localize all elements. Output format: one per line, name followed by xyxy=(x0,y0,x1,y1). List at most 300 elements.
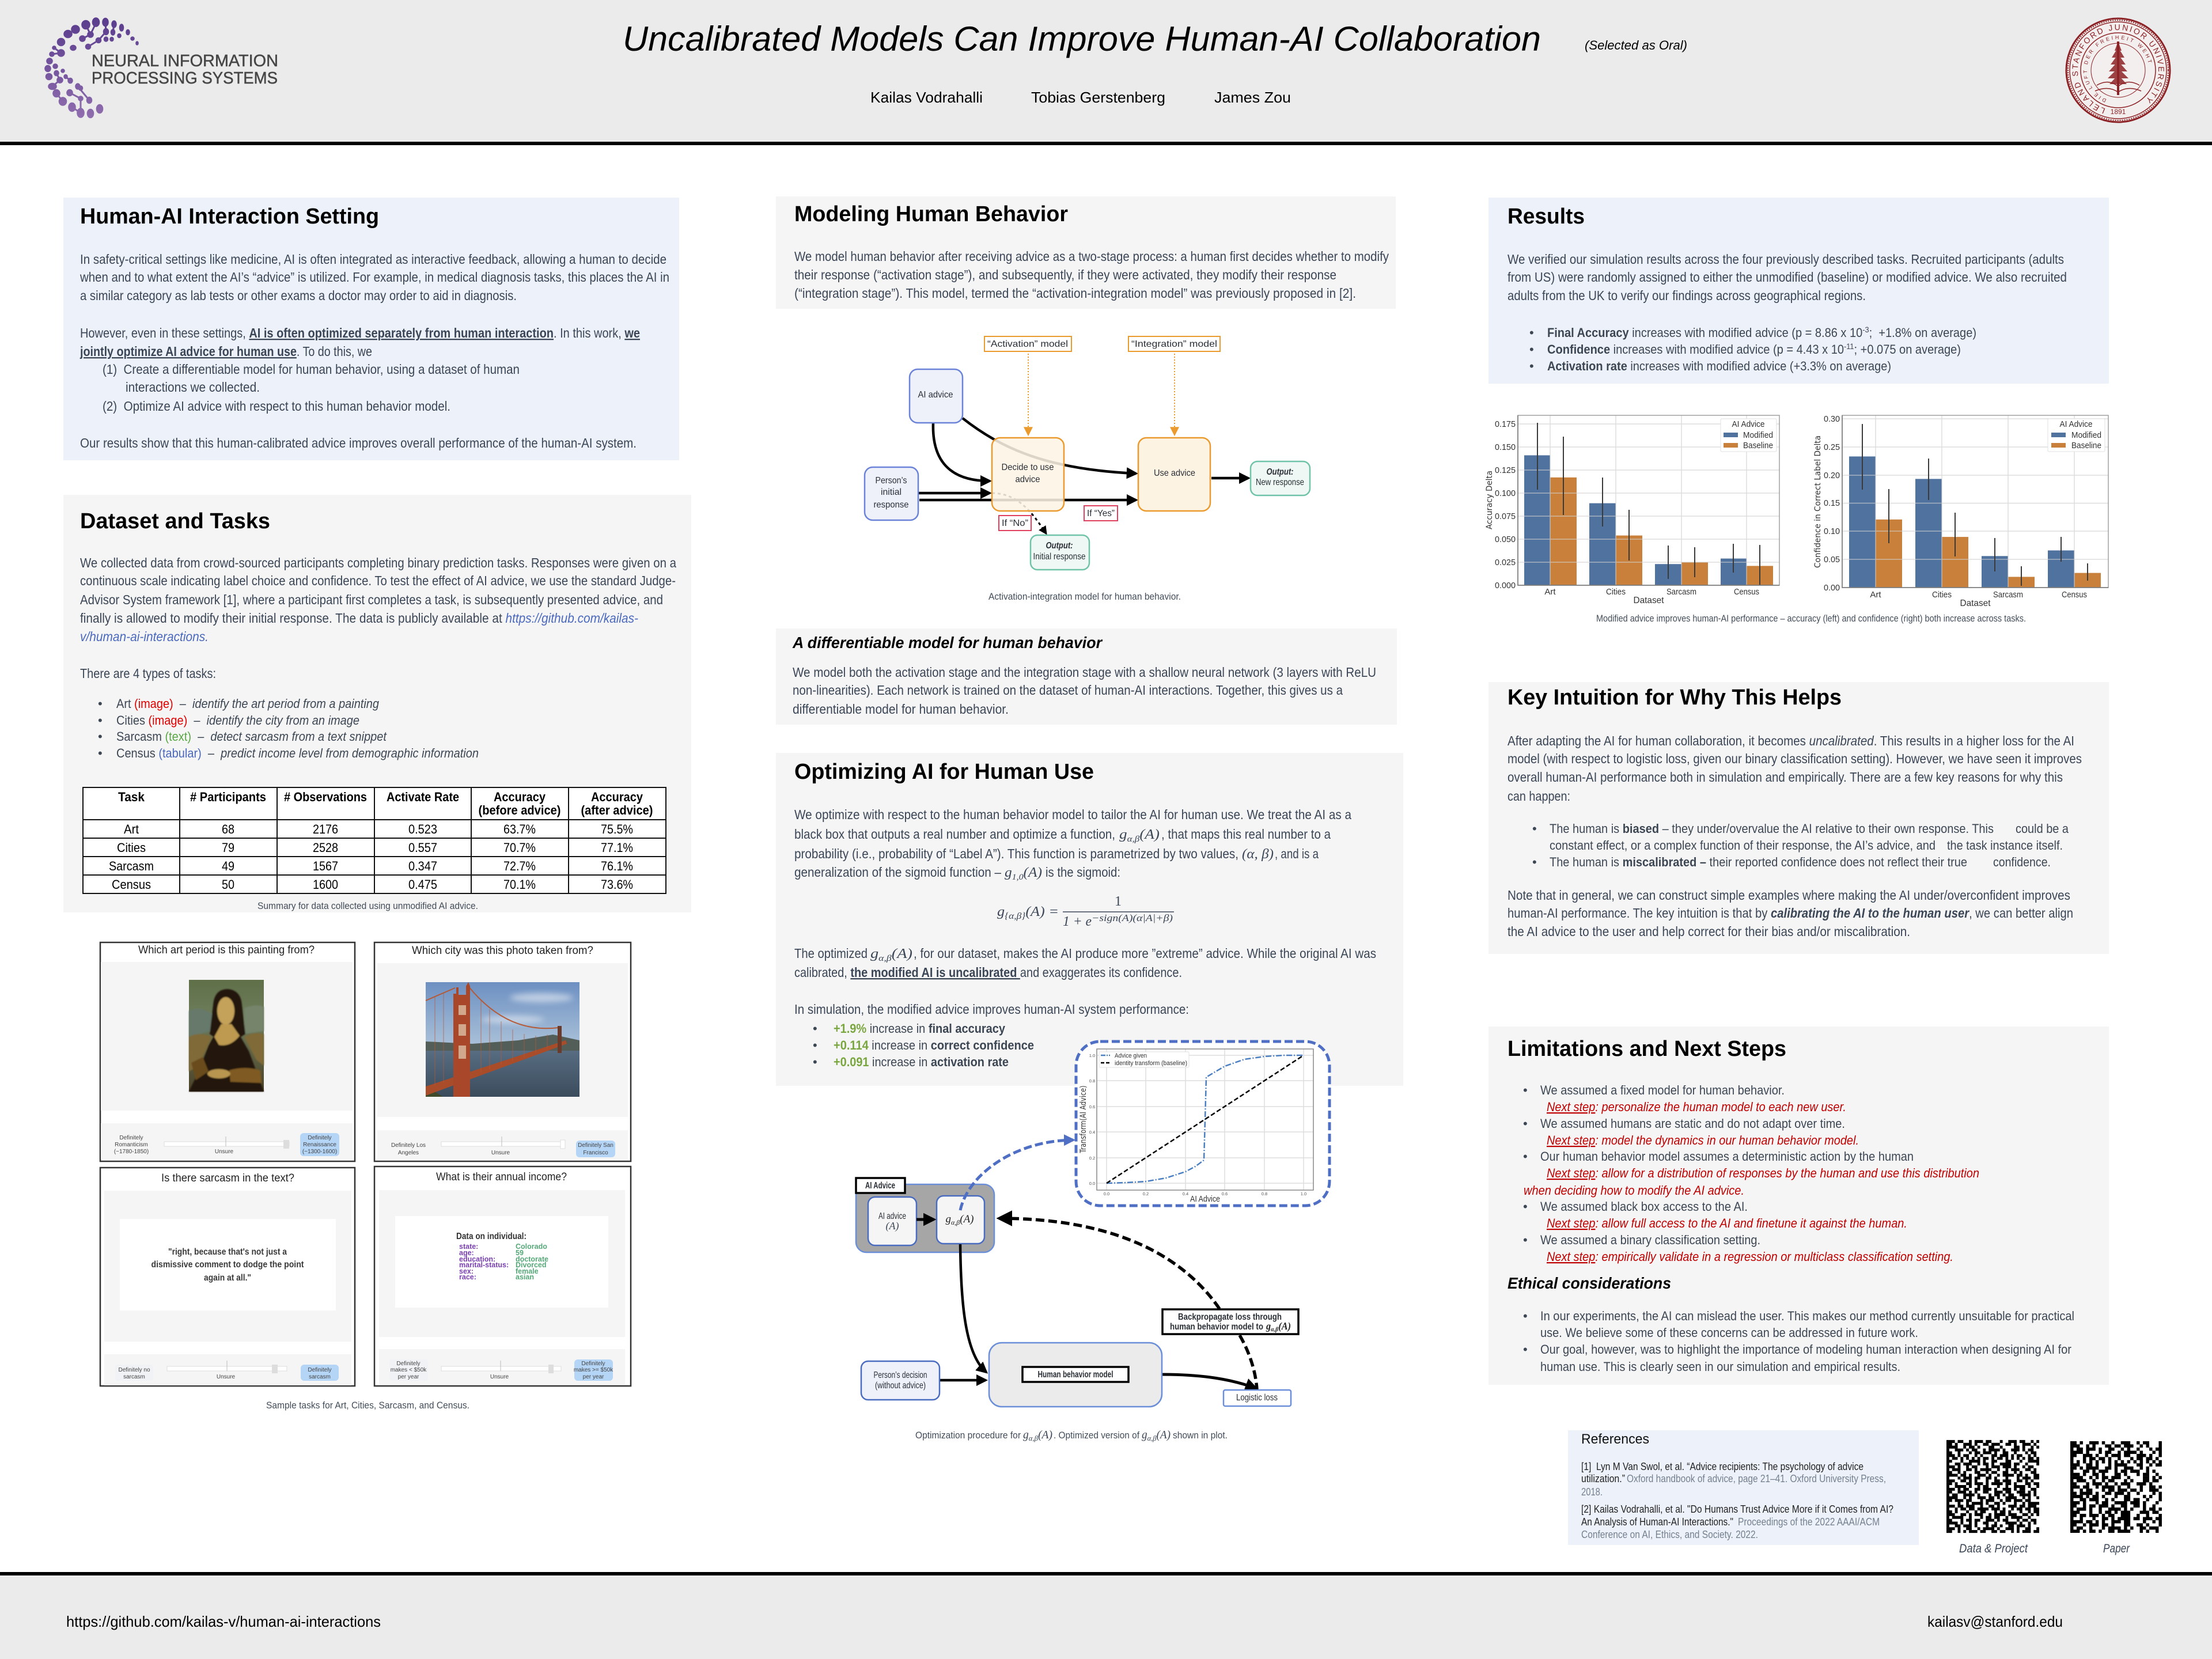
sub-heading: A differentiable model for human behavior xyxy=(792,634,1103,652)
limitations list: • xyxy=(1523,1116,1528,1131)
reasons list: The human is miscalibrated – their reported confidence does not reflect their true xyxy=(1550,855,1967,869)
optimization caption: (A) xyxy=(1038,1429,1052,1441)
box: AI advice xyxy=(910,369,963,423)
answer slider: sarcasm xyxy=(123,1374,145,1380)
authors: Tobias Gerstenberg xyxy=(1031,89,1165,106)
sample task: art xyxy=(100,942,355,1161)
data table: 77.1% xyxy=(601,840,633,855)
legend: Advice given xyxy=(1115,1052,1147,1059)
panel: Results xyxy=(1488,198,2109,384)
y tick labels: 0.25 xyxy=(1824,442,1840,452)
description text: There are 4 types of tasks: xyxy=(80,666,216,681)
description text: overall human-AI performance both in simulation and empirically. There are a few key reasons for why this xyxy=(1508,770,2063,785)
diagram caption: Activation-integration model for human behavior. xyxy=(988,591,1181,602)
results list xyxy=(1529,325,1976,373)
key intuition text: human-AI performance. The key intuition is that by calibrating the AI to the human user, we can better align xyxy=(1508,906,2073,921)
optimization caption: shown in plot. xyxy=(1173,1430,1228,1441)
box: Activation model: “Activation” model xyxy=(987,339,1068,349)
x tick labels: Sarcasm xyxy=(1993,590,2023,600)
task type list xyxy=(98,696,479,760)
y tick labels: 0.15 xyxy=(1824,498,1840,508)
box: output initial response xyxy=(1031,535,1089,570)
data table: 73.6% xyxy=(601,877,633,892)
group: AI Advice xyxy=(856,1178,994,1252)
ethical list: Our goal, however, was to highlight the importance of modeling human interaction when designing AI for xyxy=(1540,1342,2071,1357)
axis tick labels: 0.4 xyxy=(1089,1130,1095,1135)
data table: 2528 xyxy=(313,840,338,855)
box: backpropagate loss: α,β xyxy=(1271,1326,1279,1333)
answer slider: Renaissance xyxy=(303,1142,336,1148)
diagram: optimization procedure xyxy=(856,1140,1298,1407)
answer slider xyxy=(391,1137,615,1157)
data table: 75.5% xyxy=(601,822,633,836)
box: output new response: Output: xyxy=(1266,467,1294,477)
sarcasm quote: dismissive comment to dodge the point xyxy=(151,1260,304,1270)
optimization caption: g xyxy=(1023,1429,1029,1441)
y tick labels: 0.175 xyxy=(1495,419,1516,429)
results list: ; +0.075 on average) xyxy=(1854,342,1961,357)
box: person's decision: (without advice) xyxy=(875,1381,926,1391)
data table: 0.475 xyxy=(408,877,437,892)
answer slider: Unsure xyxy=(215,1149,234,1155)
y tick labels: 0.000 xyxy=(1495,581,1516,590)
axis tick labels: 0.0 xyxy=(1089,1181,1095,1186)
limitations list: • xyxy=(1523,1083,1528,1097)
limitations list: Next step: model the dynamics in our human behavior model. xyxy=(1547,1133,1859,1147)
description text: We collected data from crowd-sourced participants completing binary prediction tasks. Responses were given on a xyxy=(80,555,676,570)
description text: g xyxy=(1005,865,1012,880)
sigmoid formula: 1 + e xyxy=(1063,914,1092,929)
reasons list xyxy=(1532,821,2069,869)
description text: We model both the activation stage and the integration stage with a shallow neural network (3 layers with ReLU xyxy=(793,665,1376,680)
x tick labels xyxy=(1544,587,1759,605)
box: backpropagate loss: g xyxy=(1266,1320,1271,1332)
data table: 72.7% xyxy=(503,859,536,873)
panel: References: [2] Kailas Vodrahalli, et al. "Do Humans Trust Advice More if it Comes from AI? xyxy=(1581,1503,1893,1515)
box: output initial response: Initial response xyxy=(1033,552,1086,562)
individual data: marital-status: xyxy=(459,1261,509,1269)
panel: References: An Analysis of Human-AI Interactions." xyxy=(1581,1516,1733,1528)
y tick labels: 0.025 xyxy=(1495,558,1516,567)
image: Mona Lisa painting xyxy=(189,980,264,1092)
sigmoid formula: g xyxy=(997,904,1004,919)
charts caption: Modified advice improves human-AI performance – accuracy (left) and confidence (right) both increase across tasks. xyxy=(1596,613,2026,624)
individual data: Colorado xyxy=(516,1243,547,1251)
limitations list xyxy=(1523,1083,1979,1264)
data table: 63.7% xyxy=(503,822,536,836)
description text: We verified our simulation results across the four previously described tasks. Recruited participants (adults xyxy=(1508,252,2064,267)
individual data: asian xyxy=(516,1273,534,1281)
heading: Human-AI Interaction Setting xyxy=(80,204,379,229)
key claim text: (1) Create a differentiable model for human behavior, using a dataset of human xyxy=(103,362,520,377)
axis tick labels: 0.6 xyxy=(1222,1191,1228,1196)
box: logistic loss xyxy=(1224,1390,1291,1406)
data table: 49 xyxy=(222,859,234,873)
logo: NeurIPS: NEURAL INFORMATION xyxy=(92,52,278,70)
data table: Sarcasm xyxy=(109,859,154,873)
limitations list: Next step: empirically validate in a regression or multiclass classification setting. xyxy=(1547,1249,1953,1264)
description text xyxy=(793,665,1376,717)
answer slider: Unsure xyxy=(217,1374,236,1380)
sample task: art: Which art period is this painting from? xyxy=(138,944,315,956)
box: person's decision: Person’s decision xyxy=(873,1370,927,1380)
individual data: age: xyxy=(459,1249,474,1257)
panel: References: Oxford handbook of advice, page 21–41. Oxford University Press, xyxy=(1627,1473,1886,1484)
box: Person's initial response: Person’s xyxy=(876,476,907,486)
results list: Activation rate increases with modified advice (+3.3% on average) xyxy=(1547,359,1891,373)
description text: can happen: xyxy=(1508,789,1570,804)
sarcasm quote: again at all." xyxy=(204,1273,251,1283)
x tick labels: Cities xyxy=(1606,587,1626,597)
box: Use advice xyxy=(1138,438,1210,511)
legend: Baseline xyxy=(2071,441,2101,450)
axis titles: Transform(AI Advice) xyxy=(1079,1085,1088,1153)
ethical list: • xyxy=(1523,1309,1528,1323)
results list: -11 xyxy=(1844,342,1854,351)
y axis title: Confidence in Correct Label Delta xyxy=(1813,435,1823,568)
description text: differentiable model for human behavior. xyxy=(793,702,1009,717)
axis tick labels: 1.0 xyxy=(1301,1191,1306,1196)
header band xyxy=(0,0,2212,145)
description text: α,β xyxy=(1127,835,1140,844)
ethical list xyxy=(1523,1309,2074,1374)
arrows xyxy=(916,1140,1257,1389)
sigmoid formula xyxy=(997,894,1174,929)
simulation results list: +0.114 increase in correct confidence xyxy=(834,1038,1034,1052)
group: AI Advice: AI Advice xyxy=(865,1181,895,1191)
data table: # Participants xyxy=(190,790,266,804)
group: AI Advice: (A) xyxy=(960,1213,974,1225)
description text: their response (“activation stage”), and subsequently, if they were activated, they modify their response xyxy=(794,267,1336,282)
image: Golden Gate Bridge photo xyxy=(426,982,579,1097)
description text: (α, β) xyxy=(1242,847,1274,862)
x tick labels: Sarcasm xyxy=(1666,587,1696,597)
data table: 1567 xyxy=(313,859,338,873)
answer slider xyxy=(114,1133,339,1156)
axis tick labels: 0.2 xyxy=(1089,1156,1095,1161)
task type list: Art (image) – identify the art period from a painting xyxy=(116,696,380,711)
panel: Human-AI Interaction Setting xyxy=(63,198,679,460)
data table: Accuracy xyxy=(591,790,643,804)
optimization caption: (A) xyxy=(1156,1429,1171,1441)
results list: • xyxy=(1529,342,1534,357)
answer slider: Definitely xyxy=(119,1135,143,1141)
task type list: • xyxy=(98,713,103,728)
label: If No: If “No” xyxy=(1002,518,1028,528)
limitations list: Our human behavior model assumes a deterministic action by the human xyxy=(1540,1149,1914,1164)
description text xyxy=(80,555,676,681)
axis tick labels: 1.0 xyxy=(1089,1053,1095,1058)
ethical list: • xyxy=(1523,1342,1528,1357)
box: Use advice: Use advice xyxy=(1154,468,1195,478)
results list: Confidence increases with modified advice (p = 4.43 x 10 xyxy=(1547,342,1867,357)
sample task: sarcasm xyxy=(100,1168,355,1386)
group: AI Advice: g xyxy=(945,1213,951,1225)
answer slider xyxy=(389,1359,613,1381)
box: backpropagate loss: (A) xyxy=(1278,1320,1291,1332)
reasons list: confidence. xyxy=(1993,855,2051,869)
subtitle: selected as oral: (Selected as Oral) xyxy=(1585,38,1687,52)
icon: QR code paper xyxy=(2070,1441,2162,1533)
task type list: • xyxy=(98,729,103,744)
limitations list: Next step: personalize the human model to each new user. xyxy=(1547,1100,1846,1114)
box: Integration model: “Integration” model xyxy=(1131,339,1217,349)
heading: Dataset and Tasks xyxy=(80,509,270,533)
heading: Modeling Human Behavior xyxy=(794,202,1068,226)
y tick labels: 0.30 xyxy=(1824,414,1840,424)
answer slider: Angeles xyxy=(398,1150,419,1156)
y tick labels: 0.20 xyxy=(1824,471,1840,480)
description text: After adapting the AI for human collaboration, it becomes uncalibrated. This results in a higher loss for the AI xyxy=(1508,733,2074,748)
box: backpropagate loss: human behavior model to xyxy=(1170,1322,1263,1332)
simulation results list: • xyxy=(813,1055,817,1069)
key claim text: interactions we collected. xyxy=(126,380,260,395)
results list: • xyxy=(1529,359,1534,373)
limitations list: We assumed humans are static and do not adapt over time. xyxy=(1540,1116,1845,1131)
y tick labels: 0.150 xyxy=(1495,442,1516,452)
data table: 0.523 xyxy=(408,822,437,836)
description text: g xyxy=(1119,827,1126,842)
answer slider: Definitely xyxy=(396,1361,421,1367)
footer band xyxy=(0,1572,2212,1659)
footer: project URL: https://github.com/kailas-v/human-ai-interactions xyxy=(66,1613,381,1630)
data table: 50 xyxy=(222,877,234,892)
data table: Art xyxy=(124,822,139,836)
table caption: Summary for data collected using unmodified AI advice. xyxy=(257,900,478,911)
individual data: race: xyxy=(459,1273,476,1281)
reasons list: • xyxy=(1532,855,1537,869)
key claim text: However, even in these settings, AI is often optimized separately from human interaction. In this work, we xyxy=(80,325,640,340)
simulation results list: +1.9% increase in final accuracy xyxy=(834,1021,1006,1036)
description text xyxy=(794,807,1351,882)
description text: non-linearities). Each network is trained on the dataset of human-AI interactions. Together, this gives us a xyxy=(793,683,1343,698)
optimized advice text xyxy=(794,946,1376,1017)
box: backpropagate loss xyxy=(1162,1309,1298,1334)
sigmoid formula: {α,β} xyxy=(1005,911,1026,921)
description text: (“integration stage”). This model, termed the “activation-integration model” was previously proposed in [2]. xyxy=(794,286,1356,301)
limitations list: We assumed a binary classification setting. xyxy=(1540,1233,1760,1247)
reasons list: constant effect, or a complex function of their response, the AI’s advice, and xyxy=(1550,838,1936,853)
axis tick labels xyxy=(1089,1053,1306,1196)
data table: Activate Rate xyxy=(387,790,459,804)
simulation results list: • xyxy=(813,1021,817,1036)
description text: We model human behavior after receiving advice as a two-stage process: a human first decides whether to modify xyxy=(794,249,1389,264)
answer slider: Unsure xyxy=(490,1374,509,1380)
box: human behavior model: Human behavior model xyxy=(1038,1370,1113,1380)
x tick labels: Dataset xyxy=(1634,596,1664,605)
y tick labels: 0.10 xyxy=(1824,527,1840,536)
legend: AI Advice xyxy=(2060,419,2092,429)
data table: 76.1% xyxy=(601,859,633,873)
box: output new response xyxy=(1251,461,1310,495)
intro text: In safety-critical settings like medicine, AI is often integrated as interactive feedback, allowing a human to decide xyxy=(80,252,666,267)
icon: QR code data and project xyxy=(1946,1440,2039,1533)
panel: References: 2018. xyxy=(1581,1486,1603,1498)
legend xyxy=(1721,419,1777,452)
x tick labels: Art xyxy=(1544,587,1556,597)
legend: identity transform (baseline) xyxy=(1115,1060,1187,1067)
box: Decide to use advice: Decide to use xyxy=(1001,463,1054,472)
y tick labels: 0.050 xyxy=(1495,535,1516,544)
description text: (A) xyxy=(1139,827,1160,842)
box: person's decision xyxy=(861,1361,940,1400)
individual data: Data on individual: xyxy=(456,1232,527,1241)
y tick labels: 0.075 xyxy=(1495,512,1516,521)
key claim text: (2) Optimize AI advice with respect to this human behavior model. xyxy=(103,399,450,414)
y tick labels xyxy=(1824,414,1840,593)
description text: , and is a xyxy=(1275,846,1319,861)
data table: Census xyxy=(112,877,151,892)
box: output initial response: Output: xyxy=(1046,541,1073,551)
sample task: census xyxy=(374,1166,631,1386)
box: Person's initial response xyxy=(865,467,918,520)
reasons list: could be a xyxy=(2016,821,2069,836)
QR caption: Data and Project: Data & Project xyxy=(1959,1542,2028,1555)
individual data: doctorate xyxy=(516,1255,548,1263)
x tick labels xyxy=(1870,590,2087,608)
answer slider: (~1300-1600) xyxy=(302,1149,337,1155)
box: human behavior model xyxy=(989,1343,1162,1407)
optimized advice text: The optimized xyxy=(794,946,868,961)
key claim text: jointly optimize AI advice for human use. To do this, we xyxy=(79,344,372,359)
box: Decide to use advice xyxy=(992,438,1064,511)
optimization caption: Optimization procedure for xyxy=(915,1430,1021,1441)
optimized advice text: α,β xyxy=(878,954,892,963)
panel: References: References xyxy=(1581,1431,1649,1447)
individual data: 59 xyxy=(516,1249,524,1257)
sample task: cities: Which city was this photo taken from? xyxy=(412,945,593,957)
sample tasks caption: Sample tasks for Art, Cities, Sarcasm, and Census. xyxy=(266,1400,469,1411)
heading: Optimizing AI for Human Use xyxy=(794,760,1094,784)
description text: probability (i.e., probability of “Label A”). This function is parametrized by two values, xyxy=(794,846,1238,861)
key intuition text xyxy=(1508,888,2073,939)
ethical list: use. We believe some of these concerns can be addressed in future work. xyxy=(1540,1325,1918,1340)
data table: (after advice) xyxy=(581,803,653,817)
description text: Advisor System framework [1], where a participant first completes a task, is subsequently presented advice, and xyxy=(80,592,663,607)
answer slider: Romanticism xyxy=(115,1142,148,1148)
sarcasm quote xyxy=(151,1247,304,1283)
answer slider: makes < $50k xyxy=(391,1367,427,1373)
limitations list: We assumed black box access to the AI. xyxy=(1540,1199,1748,1214)
key intuition text: the AI advice to the user and help correct for their bias and/or miscalibration. xyxy=(1508,924,1910,939)
optimized advice text: (A) xyxy=(892,946,912,961)
description text: finally is allowed to modify their initial response. The data is publicly available at https://github.com/kailas- xyxy=(80,611,638,626)
individual data: education: xyxy=(459,1255,495,1263)
line chart: optimized advice transform xyxy=(1076,1041,1330,1206)
panel: References: Conference on AI, Ethics, and Society. 2022. xyxy=(1581,1529,1758,1540)
answer slider: makes >= $50k xyxy=(574,1367,613,1373)
y tick labels: 0.00 xyxy=(1824,583,1840,593)
heading: Results xyxy=(1508,204,1585,229)
data table: 0.557 xyxy=(408,840,437,855)
description text xyxy=(1508,733,2082,804)
individual data: Divorced xyxy=(516,1261,546,1269)
data table: 70.7% xyxy=(503,840,536,855)
diagram: activation-integration model xyxy=(865,336,1310,570)
description text: from US) were randomly assigned to either the unmodified (baseline) or modified advice. We also recruited xyxy=(1508,270,2067,285)
sample task: sarcasm: Is there sarcasm in the text? xyxy=(161,1172,294,1184)
limitations list: • xyxy=(1523,1149,1528,1164)
box: Decide to use advice: advice xyxy=(1015,475,1040,484)
answer slider: Francisco xyxy=(583,1150,608,1156)
task type list: Census (tabular) – predict income level from demographic information xyxy=(116,746,479,760)
optimization caption: g xyxy=(1142,1429,1147,1441)
description text: , that maps this real number to a xyxy=(1161,827,1331,842)
optimization caption: . Optimized version of xyxy=(1054,1430,1139,1441)
task type list: Sarcasm (text) – detect sarcasm from a text snippet xyxy=(116,729,387,744)
answer slider xyxy=(115,1361,339,1381)
box: Activation model xyxy=(984,336,1071,351)
description text: is the sigmoid: xyxy=(1046,865,1120,880)
y tick labels: 0.05 xyxy=(1824,555,1840,565)
axis titles: AI Advice xyxy=(1190,1194,1220,1204)
panel: Optimizing AI for Human Use xyxy=(776,753,1403,1086)
axis tick labels: 0.8 xyxy=(1262,1191,1267,1196)
logo: NeurIPS xyxy=(45,18,278,118)
box: Person's initial response: response xyxy=(873,500,909,510)
limitations list: • xyxy=(1523,1199,1528,1214)
limitations list: We assumed a fixed model for human behavior. xyxy=(1540,1083,1785,1097)
description text: (A) xyxy=(1024,865,1042,880)
bar chart: accuracy delta xyxy=(1485,415,1779,605)
limitations list: Next step: allow full access to the AI and finetune it against the human. xyxy=(1547,1216,1907,1230)
description text: adults from the UK to verify our findings across geographical regions. xyxy=(1508,288,1866,303)
panel: A differentiable model xyxy=(776,628,1397,725)
x tick labels: Census xyxy=(1734,587,1759,597)
legend xyxy=(1099,1052,1189,1067)
group: AI Advice: (A) xyxy=(886,1220,899,1232)
label: If Yes: If “Yes” xyxy=(1087,509,1115,518)
answer slider: per year xyxy=(583,1374,604,1380)
intro text xyxy=(79,252,669,303)
heading: Limitations and Next Steps xyxy=(1508,1037,1786,1061)
panel: References: Proceedings of the 2022 AAAI/ACM xyxy=(1738,1516,1880,1528)
individual data xyxy=(456,1232,548,1281)
description text: v/human-ai-interactions. xyxy=(80,629,209,644)
reasons list: the task instance itself. xyxy=(1947,838,2063,853)
axis titles xyxy=(1079,1085,1220,1204)
optimization caption xyxy=(915,1429,1228,1442)
optimization caption: α,β xyxy=(1147,1434,1157,1442)
x tick labels: Dataset xyxy=(1960,599,1991,608)
answer slider: Unsure xyxy=(491,1150,510,1156)
key claim text xyxy=(79,325,640,414)
data table: 70.1% xyxy=(503,877,536,892)
data table: Task xyxy=(118,790,145,804)
group: AI Advice: α,β xyxy=(951,1218,960,1226)
data table: 2176 xyxy=(313,822,338,836)
y axis title: Accuracy Delta xyxy=(1485,471,1494,529)
x tick labels: Art xyxy=(1870,590,1881,600)
panel: Key Intuition xyxy=(1488,682,2109,954)
description text: generalization of the sigmoid function – xyxy=(794,865,1001,880)
simulation results list: +0.091 increase in activation rate xyxy=(834,1055,1009,1069)
simulation results list xyxy=(813,1021,1034,1069)
x tick labels: Census xyxy=(2062,590,2087,600)
legend: Modified xyxy=(1743,430,1773,440)
answer slider: Definitely xyxy=(581,1361,605,1367)
y tick labels: 0.125 xyxy=(1495,465,1516,475)
group: AI Advice: AI advice xyxy=(878,1211,906,1221)
simulation results list: • xyxy=(813,1038,817,1052)
data table: 79 xyxy=(222,840,234,855)
axis tick labels: 0.8 xyxy=(1089,1078,1095,1084)
panel: References: utilization.” xyxy=(1581,1473,1625,1484)
legend xyxy=(2048,419,2105,452)
panel: Modeling Human Behavior xyxy=(776,196,1396,309)
optimized advice text: , for our dataset, makes the AI produce more ”extreme” advice. While the original AI was xyxy=(914,946,1376,961)
box: AI advice: AI advice xyxy=(918,390,953,400)
